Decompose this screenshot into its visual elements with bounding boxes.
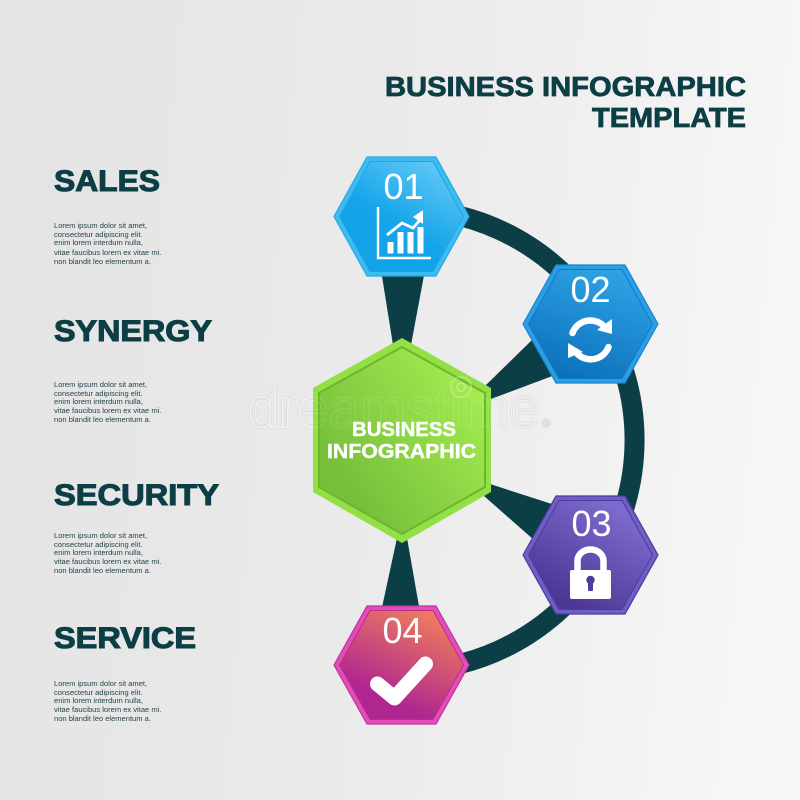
text block: synergy: consectetur adipiscing elit. (54, 389, 143, 398)
text block: security: consectetur adipiscing elit. (54, 540, 143, 549)
text block: security: vitae faucibus lorem ex vitae mi. (54, 557, 161, 566)
title: TEMPLATE (592, 102, 746, 133)
panel: security text (54, 479, 219, 575)
hexagon 04 (334, 606, 469, 724)
number 04: 04 (382, 610, 423, 651)
text block: sales: non blandit leo elementum a. (54, 257, 151, 266)
title (385, 71, 746, 133)
icon: padlock (570, 550, 611, 599)
icon: bar chart (378, 207, 431, 258)
text block: synergy: non blandit leo elementum a. (54, 415, 151, 424)
text block: service: non blandit leo elementum a. (54, 714, 151, 723)
number 02: 02 (570, 269, 611, 310)
watermark overlay: dreamstime (248, 376, 540, 439)
central hexagon (248, 338, 540, 543)
icon: check mark (378, 664, 426, 698)
text block: sales: enim lorem interdum nulla, (54, 238, 143, 247)
spoke: to 02 (486, 340, 555, 399)
arc connector (460, 216, 635, 664)
central label: BUSINESS (352, 419, 456, 441)
text block: synergy: Lorem ipsum dolor sit amet, (54, 380, 147, 389)
text block: service (54, 679, 161, 723)
text block: service: Lorem ipsum dolor sit amet, (54, 679, 147, 688)
panel: sales text (54, 165, 161, 266)
icon: refresh (568, 319, 612, 359)
text block: security: Lorem ipsum dolor sit amet, (54, 531, 147, 540)
text block: service: consectetur adipiscing elit. (54, 688, 143, 697)
heading: sales: SALES (54, 165, 160, 198)
panel: synergy text (54, 315, 212, 424)
text block: security: enim lorem interdum nulla, (54, 548, 143, 557)
hexagon 03 (523, 496, 658, 614)
text block: sales (54, 221, 161, 266)
text block: service: enim lorem interdum nulla, (54, 696, 143, 705)
heading: security: SECURITY (54, 479, 219, 512)
spoke: to 03 (484, 484, 555, 540)
text block: sales: consectetur adipiscing elit. (54, 230, 143, 239)
central label (327, 419, 476, 463)
watermark: dreamstime (248, 376, 540, 439)
text block: security: non blandit leo elementum a. (54, 566, 151, 575)
number 01: 01 (383, 166, 424, 207)
hexagon 01 (334, 157, 469, 276)
text block: security (54, 531, 161, 575)
text block: service: vitae faucibus lorem ex vitae mi. (54, 705, 161, 714)
text block: sales: vitae faucibus lorem ex vitae mi. (54, 248, 161, 257)
text block: synergy (54, 380, 161, 424)
spoke: to 01 (381, 270, 425, 345)
text block: synergy: enim lorem interdum nulla, (54, 397, 143, 406)
watermark: dreamstime (248, 376, 540, 439)
panel: service text (54, 622, 196, 723)
spoke: to 04 (381, 538, 420, 612)
text block: synergy: vitae faucibus lorem ex vitae mi. (54, 406, 161, 415)
text block: sales: Lorem ipsum dolor sit amet, (54, 221, 147, 230)
hexagon 02 (523, 265, 658, 383)
number 03: 03 (571, 503, 612, 544)
heading: service: SERVICE (54, 622, 196, 655)
central label: INFOGRAPHIC (327, 441, 476, 463)
title: BUSINESS INFOGRAPHIC (385, 71, 746, 102)
heading: synergy: SYNERGY (54, 315, 212, 348)
